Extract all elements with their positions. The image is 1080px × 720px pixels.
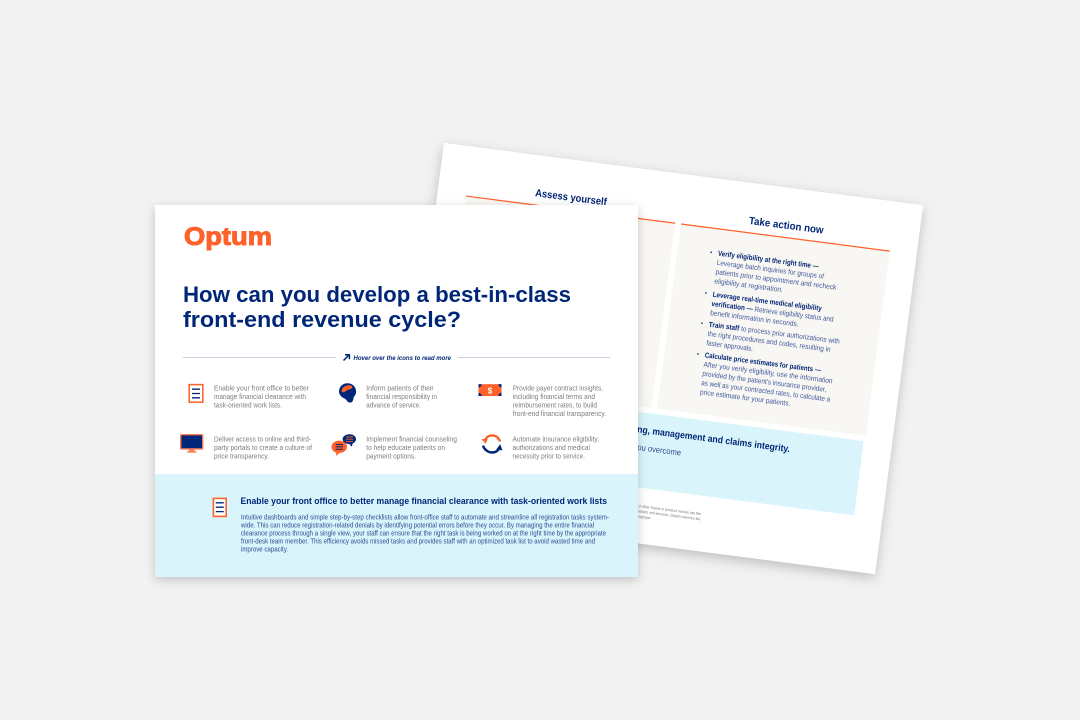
action list: as well as your contracted rates, to calculate a: [701, 378, 832, 404]
item: automate eligibility: necessity prior to service.: [512, 452, 585, 460]
action list: eligibility at registration.: [714, 276, 784, 294]
action list: faster approvals.: [706, 338, 754, 353]
title: [183, 282, 571, 332]
action list: [692, 248, 850, 413]
item: online portals: party portals to create a culture of: [214, 443, 313, 452]
item: payer contract insights: front-end financial transparency.: [513, 409, 606, 418]
item: work lists: manage financial clearance with: [214, 392, 306, 401]
action list: Train staff to process prior authorizations with: [708, 320, 840, 346]
action list: benefit information in seconds.: [710, 308, 799, 329]
detail text: improve capacity.: [241, 546, 288, 553]
footnote: d other brand or product names are the: [638, 504, 701, 516]
icon: sync arrows: [482, 435, 502, 452]
item: online portals: price transparency.: [214, 452, 269, 460]
detail text: [240, 514, 609, 553]
item: automate eligibility: [482, 434, 599, 460]
panel: assess yourself: Assess yourself: [535, 187, 608, 208]
item: online portals: [181, 434, 313, 460]
callout band: [432, 386, 864, 515]
icon: dollar bill: $: [488, 386, 493, 395]
item: work lists: task-oriented work lists.: [214, 400, 282, 410]
action list: price estimate for your patients.: [700, 387, 791, 408]
icon: head: [339, 383, 356, 403]
icon: arrow: [344, 355, 349, 360]
item: patient responsibility: advance of service.: [366, 400, 421, 410]
panel: take action now: [657, 206, 892, 436]
item: work lists: Enable your front office to better: [214, 384, 310, 392]
item: financial counseling: [331, 434, 457, 460]
front page sheet: [155, 205, 638, 577]
item: patient responsibility: [339, 383, 437, 410]
icon: monitor: [181, 435, 203, 453]
item: financial counseling: payment options.: [366, 452, 416, 460]
icon: checklist: [213, 498, 226, 516]
item: online portals: Deliver access to online and third-: [214, 434, 311, 444]
front page: [155, 205, 638, 577]
footnote: mployer: [638, 515, 652, 520]
action list: Verify eligibility at the right time —: [718, 249, 820, 271]
action list: provided by the patient's insurance provider,: [702, 369, 827, 394]
callout band: ng, management and claims integrity.: [636, 424, 791, 455]
instruction: Hover over the icons to read more: [354, 355, 451, 362]
detail text: clearance process through a single view, your staff can ensure that the right task is being worked on at the right time by the appropriate: [241, 530, 606, 537]
title: front-end revenue cycle?: [183, 307, 461, 332]
item: automate eligibility: Automate insurance eligibility,: [512, 434, 599, 444]
action list: verification — Retrieve eligibility status and: [711, 299, 834, 324]
detail heading: Enable your front office to better manage financial clearance with task-oriented work lists: [240, 496, 607, 506]
item: patient responsibility: financial responsibility in: [366, 392, 437, 401]
detail text: wide. This can reduce registration-related denials by identifying potential errors before they occur. By managing the entire financial: [240, 522, 594, 529]
action list: After you verify eligibility, use the information: [703, 360, 833, 385]
panel: assess yourself: [442, 178, 677, 408]
logo: Optum: [184, 223, 272, 251]
footnote: [637, 504, 701, 527]
callout band: ou overcome: [637, 442, 682, 458]
action list: Leverage batch inquiries for groups of: [716, 258, 825, 281]
back page: [396, 143, 923, 574]
item: payer contract insights: including financial terms and: [513, 392, 595, 401]
item: payer contract insights: Provide payer contract insights,: [513, 384, 603, 392]
item: work lists: [189, 384, 310, 410]
action list: Calculate price estimates for patients —: [704, 350, 822, 374]
icon: checklist: [189, 385, 203, 402]
item: payer contract insights: reimbursement rates, to build: [513, 400, 597, 410]
action list: patients prior to appointment and recheck: [715, 267, 837, 292]
title: How can you develop a best-in-class: [183, 282, 571, 307]
item: financial counseling: Implement financial counseling: [366, 434, 457, 444]
item: patient responsibility: Inform patients of their: [366, 384, 434, 392]
action list: Leverage real-time medical eligibility: [712, 290, 823, 313]
back page sheet: [396, 143, 923, 574]
panel: detail band: [155, 474, 638, 577]
item: automate eligibility: authorizations and medical: [512, 443, 590, 452]
heading: take action now: Take action now: [748, 215, 825, 237]
item: financial counseling: to help educate patients on: [366, 443, 445, 452]
detail text: front-desk team member. This efficiency avoids missed tasks and provides staff with an optimized task list to avoid wasted time and: [241, 538, 595, 545]
detail text: Intuitive dashboards and simple step-by-step checklists allow front-office staff to automate and streamline all registration tasks system-: [241, 514, 609, 521]
action list: the right procedures and codes, resulting in: [707, 329, 831, 354]
footnote: oducts and services. Optum reserves the: [638, 509, 701, 521]
item: payer contract insights: [478, 384, 606, 418]
icon: chat bubbles: [331, 434, 356, 456]
